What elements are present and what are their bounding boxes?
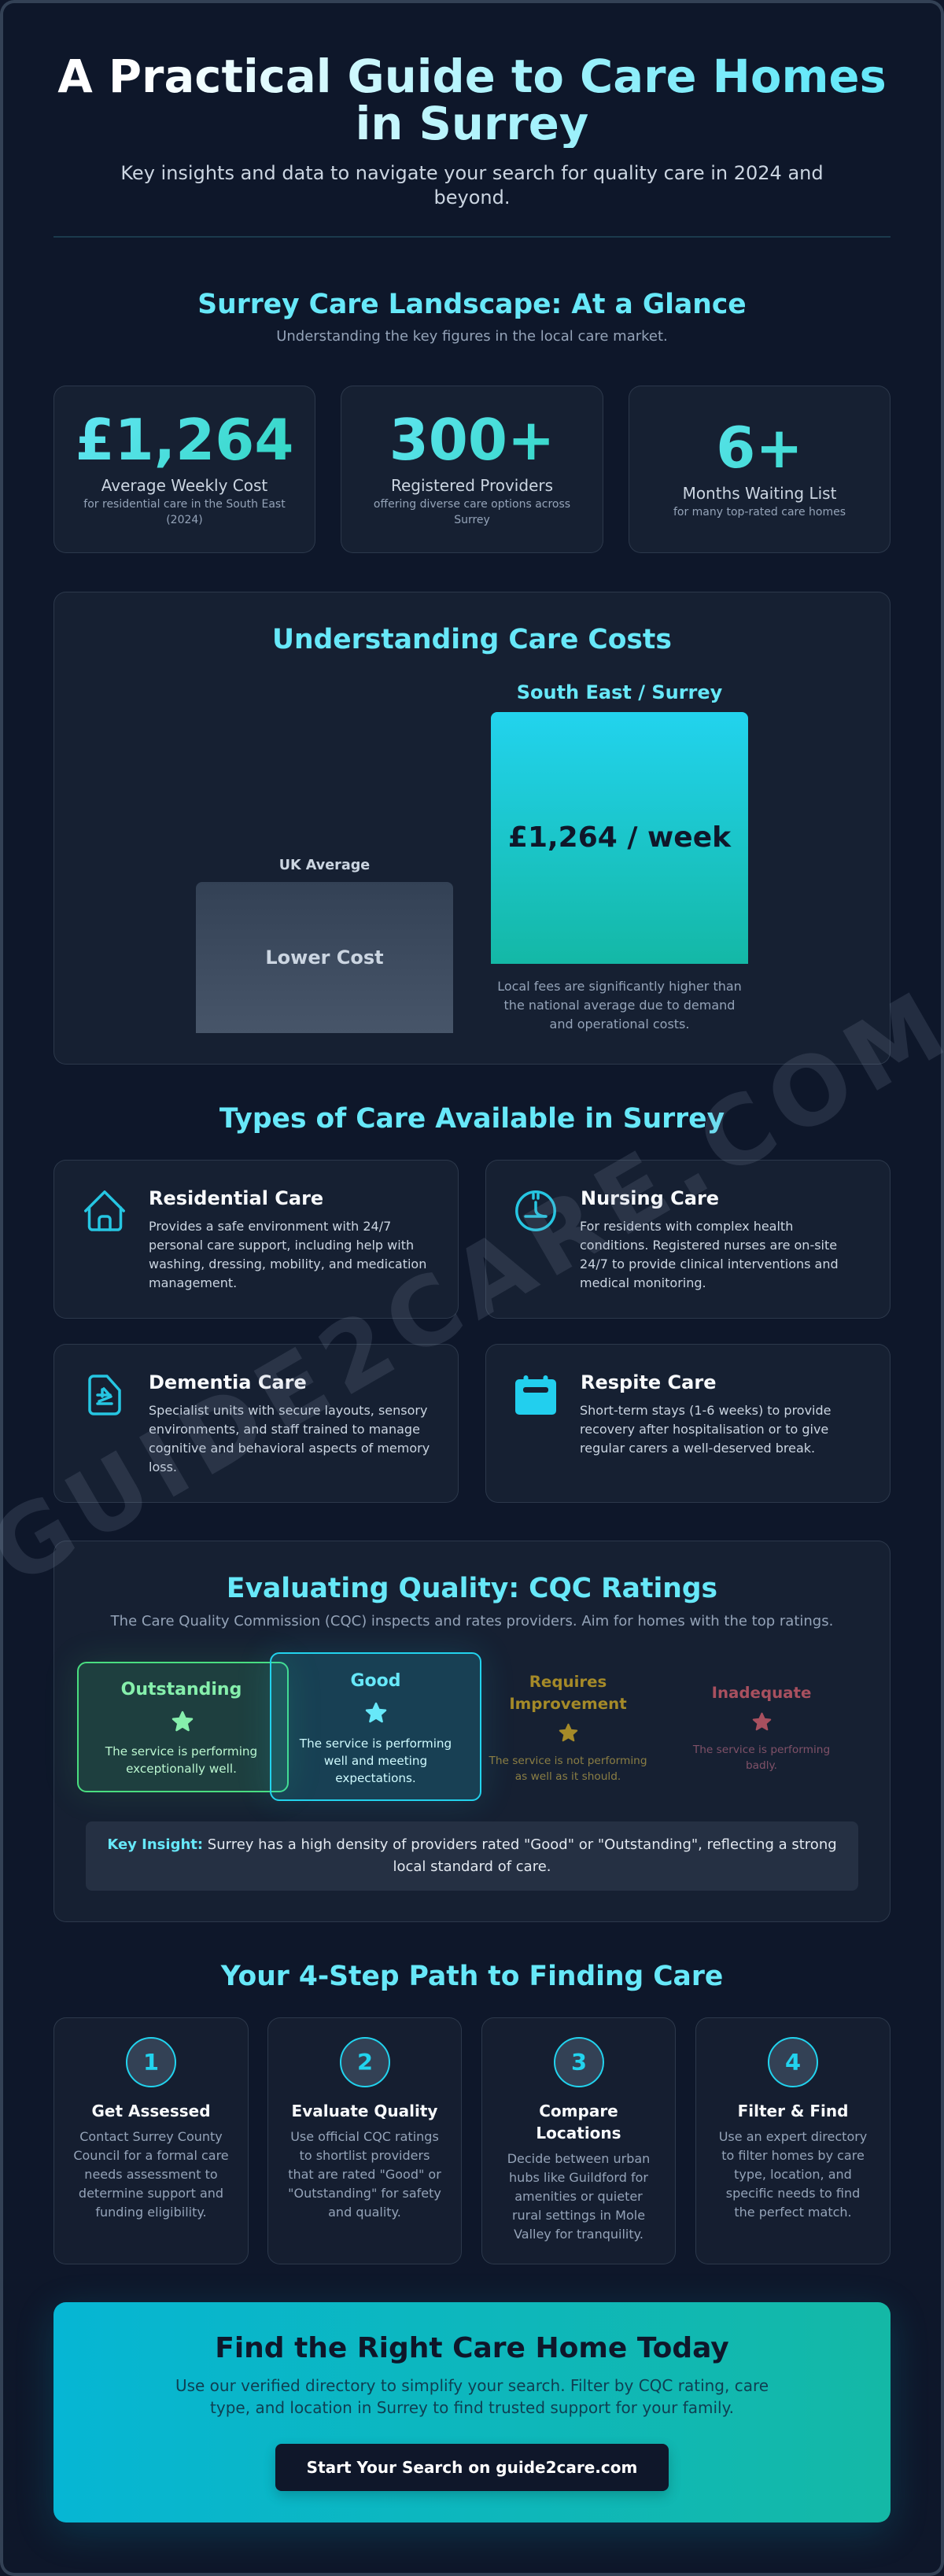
CTA heading: Find the Right Care Home Today bbox=[215, 2332, 729, 2364]
card text: loss. bbox=[149, 1460, 177, 1474]
stat note bbox=[374, 498, 570, 526]
rating text: exceptionally well. bbox=[126, 1762, 237, 1776]
rating: requires improvement bbox=[489, 1673, 647, 1783]
step title: Compare bbox=[539, 2102, 618, 2120]
step text: funding eligibility. bbox=[95, 2205, 207, 2220]
step title: Evaluate Quality bbox=[292, 2102, 437, 2120]
rating text: The service is not performing bbox=[489, 1755, 647, 1767]
callout text bbox=[107, 1836, 837, 1875]
card text: environments, and staff trained to manage bbox=[149, 1422, 420, 1437]
card text: 24/7 to provide clinical interventions and bbox=[580, 1256, 839, 1271]
title: in Surrey bbox=[356, 98, 588, 150]
bar label: UK average: UK Average bbox=[279, 858, 370, 873]
card text: For residents with complex health bbox=[580, 1218, 793, 1234]
card text: medical monitoring. bbox=[580, 1275, 706, 1290]
subheading: CQC ratings: The Care Quality Commission (CQC) inspects and rates providers. Aim for homes with the top ratings. bbox=[111, 1613, 833, 1629]
step title: Filter & Find bbox=[738, 2102, 848, 2120]
rating name: Good bbox=[350, 1671, 401, 1690]
panel: nursing care bbox=[485, 1160, 891, 1319]
icon: calendar bbox=[515, 1375, 556, 1415]
rating name: Requires bbox=[529, 1673, 607, 1690]
step text bbox=[73, 2129, 229, 2220]
rating text bbox=[105, 1744, 257, 1776]
stat note: (2024) bbox=[166, 514, 203, 526]
icon: house bbox=[84, 1190, 125, 1231]
card text: recovery after hospitalisation or to give bbox=[580, 1422, 828, 1437]
subtitle: beyond. bbox=[434, 186, 510, 208]
panel: care costs bbox=[53, 592, 891, 1065]
stat card: weekly cost bbox=[53, 386, 315, 553]
icon: clock bbox=[515, 1190, 556, 1231]
step text: Use an expert directory bbox=[719, 2129, 867, 2144]
step title bbox=[536, 2102, 621, 2142]
step text: to shortlist providers bbox=[300, 2148, 430, 2163]
step text: Contact Surrey County bbox=[79, 2129, 223, 2144]
rating text: The service is performing bbox=[300, 1736, 452, 1751]
step text: Decide between urban bbox=[507, 2151, 650, 2166]
stat card: waiting list bbox=[629, 386, 891, 553]
bar: South East bbox=[491, 712, 748, 964]
rating: outstanding bbox=[77, 1662, 289, 1792]
step text: specific needs to find bbox=[726, 2186, 860, 2201]
title bbox=[53, 54, 891, 148]
step 1 bbox=[53, 2017, 249, 2264]
panel: residential care bbox=[53, 1160, 459, 1319]
card title: Residential Care bbox=[149, 1187, 323, 1209]
CTA button bbox=[275, 2444, 669, 2491]
step text bbox=[288, 2129, 441, 2220]
step text: type, location, and bbox=[734, 2167, 852, 2182]
rating text bbox=[692, 1744, 830, 1772]
heading: types of care: Types of Care Available in Surrey bbox=[219, 1103, 725, 1135]
callout text: Key Insight: Surrey has a high density of providers rated "Good" or "Outstanding", reflecting a strong bbox=[107, 1836, 837, 1853]
stat number: 6+ bbox=[716, 415, 803, 481]
rating text: badly. bbox=[746, 1759, 777, 1772]
step number bbox=[554, 2037, 604, 2087]
bar note: Local fees are significantly higher than bbox=[497, 979, 742, 993]
callout: key insight bbox=[86, 1821, 858, 1891]
CTA text bbox=[175, 2376, 769, 2417]
icon: document bbox=[88, 1375, 121, 1415]
stat label: Months Waiting List bbox=[683, 484, 836, 503]
bar note bbox=[497, 979, 742, 1031]
stat note: offering diverse care options across bbox=[374, 498, 570, 511]
rating: good bbox=[270, 1652, 481, 1801]
bar value: lower cost: Lower Cost bbox=[265, 947, 384, 969]
title: A Practical Guide to Care Homes bbox=[57, 50, 887, 103]
step text: hubs like Guildford for bbox=[509, 2170, 648, 2185]
subtitle: Key insights and data to navigate your search for quality care in 2024 and bbox=[120, 162, 824, 184]
step number: 1 bbox=[143, 2049, 159, 2076]
step number bbox=[768, 2037, 818, 2087]
icon: star bbox=[365, 1703, 387, 1723]
card text: Specialist units with secure layouts, sensory bbox=[149, 1403, 427, 1418]
panel: dementia care bbox=[53, 1344, 459, 1503]
card text bbox=[580, 1403, 831, 1456]
card text: Provides a safe environment with 24/7 bbox=[149, 1218, 391, 1234]
card text: conditions. Registered nurses are on-site bbox=[580, 1237, 837, 1253]
step text: that are rated "Good" or bbox=[288, 2167, 441, 2182]
card text bbox=[149, 1218, 426, 1290]
callout text: local standard of care. bbox=[393, 1858, 551, 1875]
heading: at a glance: Surrey Care Landscape: At a Glance bbox=[197, 288, 747, 319]
step text: the perfect match. bbox=[734, 2205, 852, 2220]
step number: 3 bbox=[571, 2049, 587, 2076]
step text: amenities or quieter bbox=[514, 2189, 643, 2204]
heading: CQC ratings: Evaluating Quality: CQC Ratings bbox=[227, 1573, 717, 1604]
panel: call to action bbox=[53, 2302, 891, 2522]
step number bbox=[126, 2037, 176, 2087]
rating name: Outstanding bbox=[121, 1679, 242, 1699]
CTA button: Start Your Search on guide2care.com bbox=[307, 2458, 637, 2477]
card text: regular carers a well-deserved break. bbox=[580, 1441, 815, 1456]
icon: star bbox=[752, 1712, 771, 1731]
step text: Council for a formal care bbox=[73, 2148, 229, 2163]
rating text bbox=[489, 1755, 647, 1783]
card text: Short-term stays (1-6 weeks) to provide bbox=[580, 1403, 831, 1418]
step title: Get Assessed bbox=[91, 2102, 211, 2120]
panel: respite care bbox=[485, 1344, 891, 1503]
stat number: 300+ bbox=[389, 407, 555, 473]
rating text: as well as it should. bbox=[515, 1770, 621, 1783]
rating name: Inadequate bbox=[712, 1684, 811, 1702]
icon: star bbox=[171, 1711, 194, 1731]
subheading: at a glance: Understanding the key figures in the local care market. bbox=[276, 328, 668, 345]
bar note: the national average due to demand bbox=[504, 998, 735, 1012]
step 4 bbox=[695, 2017, 891, 2264]
card text bbox=[149, 1403, 430, 1474]
bar value: weekly fee: £1,264 / week bbox=[508, 821, 731, 854]
step text: "Outstanding" for safety bbox=[288, 2186, 441, 2201]
stat note: for many top-rated care homes bbox=[673, 506, 846, 519]
subtitle bbox=[120, 162, 824, 208]
rating: inadequate bbox=[692, 1684, 830, 1772]
card text: cognitive and behavioral aspects of memory bbox=[149, 1441, 430, 1456]
rating text: expectations. bbox=[335, 1771, 416, 1785]
rating text: The service is performing bbox=[105, 1744, 257, 1759]
card title: Dementia Care bbox=[149, 1371, 307, 1393]
step number: 4 bbox=[785, 2049, 801, 2076]
stat label: Average Weekly Cost bbox=[101, 476, 267, 495]
step text: determine support and bbox=[79, 2186, 223, 2201]
step text: Use official CQC ratings bbox=[290, 2129, 439, 2144]
rating name: Improvement bbox=[509, 1695, 627, 1713]
step text: needs assessment to bbox=[84, 2167, 218, 2182]
stat number bbox=[341, 408, 603, 471]
stat number: £1,264 bbox=[76, 407, 293, 473]
heading: steps: Your 4-Step Path to Finding Care bbox=[221, 1961, 723, 1992]
step 2 bbox=[267, 2017, 462, 2264]
bar note: and operational costs. bbox=[550, 1017, 689, 1031]
stat number bbox=[629, 416, 891, 479]
icon: star bbox=[559, 1723, 577, 1742]
card text: personal care support, including help with bbox=[149, 1237, 414, 1253]
rating text: The service is performing bbox=[693, 1744, 830, 1756]
card text: management. bbox=[149, 1275, 237, 1290]
stat note: Surrey bbox=[454, 514, 490, 526]
stat note bbox=[83, 498, 286, 526]
rating name bbox=[509, 1673, 627, 1713]
heading: care costs: Understanding Care Costs bbox=[272, 624, 672, 655]
stat label: Registered Providers bbox=[391, 476, 553, 495]
step text: to filter homes by care bbox=[721, 2148, 865, 2163]
CTA text: type, and location in Surrey to find trusted support for your family. bbox=[210, 2398, 734, 2417]
step text bbox=[507, 2151, 650, 2242]
card title: Nursing Care bbox=[581, 1187, 719, 1209]
step text: rural settings in Mole bbox=[512, 2208, 645, 2223]
step text: Valley for tranquility. bbox=[514, 2227, 643, 2242]
rating text bbox=[299, 1736, 452, 1785]
stat card: providers bbox=[341, 386, 603, 553]
card title: Respite Care bbox=[581, 1371, 716, 1393]
stat note: for residential care in the South East bbox=[83, 498, 286, 511]
card text bbox=[580, 1218, 839, 1290]
bar: UK average bbox=[196, 882, 453, 1033]
CTA text: Use our verified directory to simplify your search. Filter by CQC rating, care bbox=[175, 2376, 769, 2395]
step 3 bbox=[481, 2017, 676, 2264]
step text: and quality. bbox=[328, 2205, 401, 2220]
rating text: well and meeting bbox=[324, 1754, 427, 1768]
header bbox=[53, 50, 891, 238]
step title: Locations bbox=[536, 2124, 621, 2142]
step number bbox=[340, 2037, 390, 2087]
card text: washing, dressing, mobility, and medication bbox=[149, 1256, 426, 1271]
step text bbox=[719, 2129, 867, 2220]
panel: CQC ratings bbox=[53, 1541, 891, 1922]
step number: 2 bbox=[357, 2049, 373, 2076]
bar label: South East: South East / Surrey bbox=[517, 681, 722, 703]
